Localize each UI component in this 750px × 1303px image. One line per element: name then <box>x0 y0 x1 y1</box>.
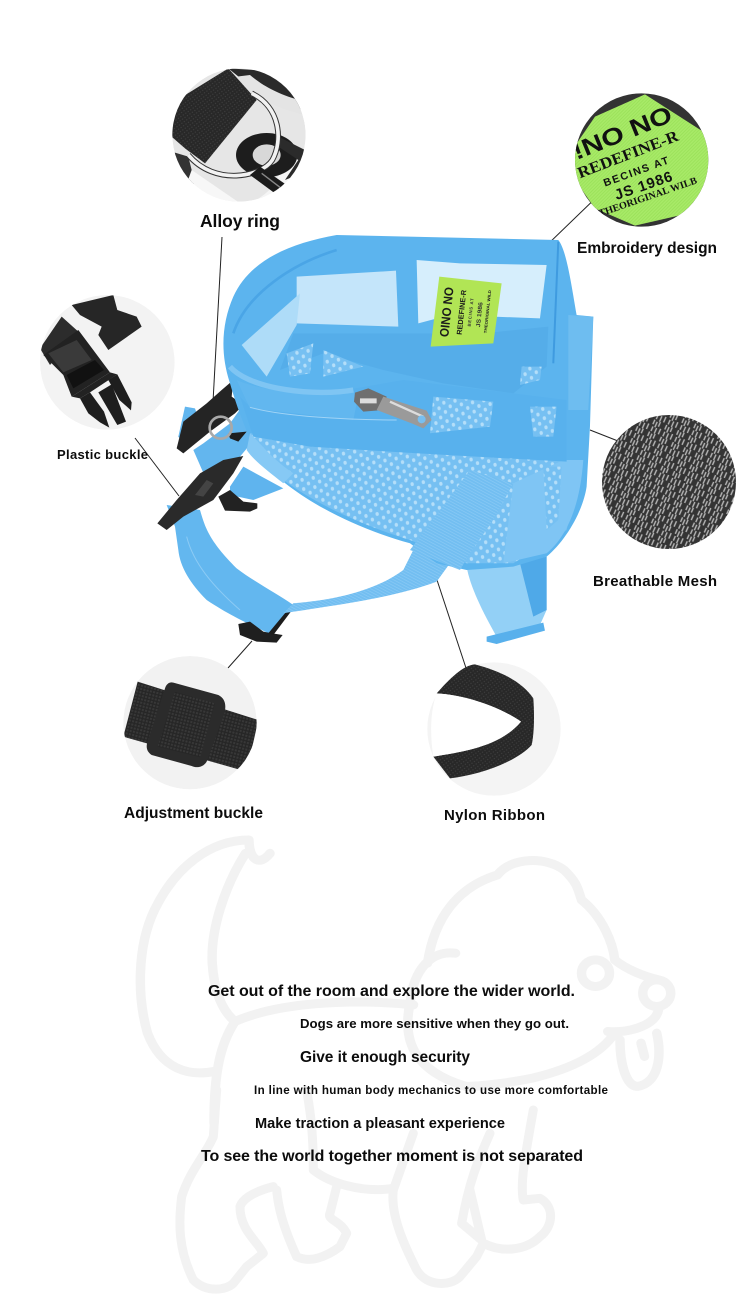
mesh windows <box>233 242 558 377</box>
left straps and buckles <box>157 380 295 643</box>
leader lines <box>135 190 618 668</box>
photo: plastic buckle <box>40 295 175 430</box>
photo: alloy ring <box>172 68 308 207</box>
watermark: dog outline <box>140 840 671 1289</box>
photo: green label close-up <box>569 92 712 228</box>
callout: plastic buckle <box>40 295 175 462</box>
label: plastic buckle: Plastic buckle <box>57 447 148 462</box>
photo: nylon ribbon <box>427 662 561 796</box>
label: embroidery design: Embroidery design <box>577 240 717 257</box>
photo: adjustment buckle <box>123 656 258 789</box>
rear strap <box>467 557 547 644</box>
callout: nylon ribbon <box>427 662 561 824</box>
text block: slogan lines: Make traction a pleasant experience <box>255 1116 505 1132</box>
photo: green label close-up: THEORIGINAL WILB <box>597 175 699 219</box>
embroidered green label: REDEFINE-R <box>455 289 468 335</box>
callout: breathable mesh <box>593 415 736 590</box>
embroidered green label <box>431 277 502 347</box>
text block: slogan lines: Dogs are more sensitive when they go out. <box>300 1016 569 1031</box>
label: alloy ring: Alloy ring <box>200 211 280 231</box>
text block: slogan lines: Get out of the room and explore the wider world. <box>208 983 575 1000</box>
embroidered green label: OINO NO <box>437 286 457 338</box>
embroidered green label: THEORIGINAL WILD <box>483 290 492 333</box>
photo: green label close-up: JS 1986 <box>613 169 675 204</box>
photo: green label close-up: REDEFINE-R <box>575 128 681 182</box>
main pack body <box>223 235 593 570</box>
text block: slogan lines: To see the world together moment is not separated <box>201 1148 583 1165</box>
text block: slogan lines <box>201 983 609 1165</box>
callout: embroidery design <box>569 92 717 257</box>
text block: slogan lines: Give it enough security <box>300 1049 470 1066</box>
photo: green label close-up: !NO NO <box>569 101 676 166</box>
harness: blue dog backpack <box>157 235 593 644</box>
photo: green label close-up: BECINS AT <box>602 155 671 189</box>
label: breathable mesh: Breathable Mesh <box>593 573 717 590</box>
text block: slogan lines: In line with human body mechanics to use more comfortable <box>254 1084 609 1097</box>
embroidered green label: BECINS AT <box>467 298 475 327</box>
label: nylon ribbon: Nylon Ribbon <box>444 807 545 824</box>
label: adjustment buckle: Adjustment buckle <box>124 805 263 822</box>
embroidered green label: JS 1986 <box>476 301 485 328</box>
dog: tail, head and back <box>140 840 671 1123</box>
belly strap <box>283 550 450 613</box>
zipper pull <box>354 388 432 428</box>
callout: adjustment buckle <box>123 656 263 822</box>
callout: alloy ring <box>172 68 308 231</box>
dog: legs and paws <box>180 1090 551 1289</box>
photo: mesh swatch <box>602 415 736 549</box>
